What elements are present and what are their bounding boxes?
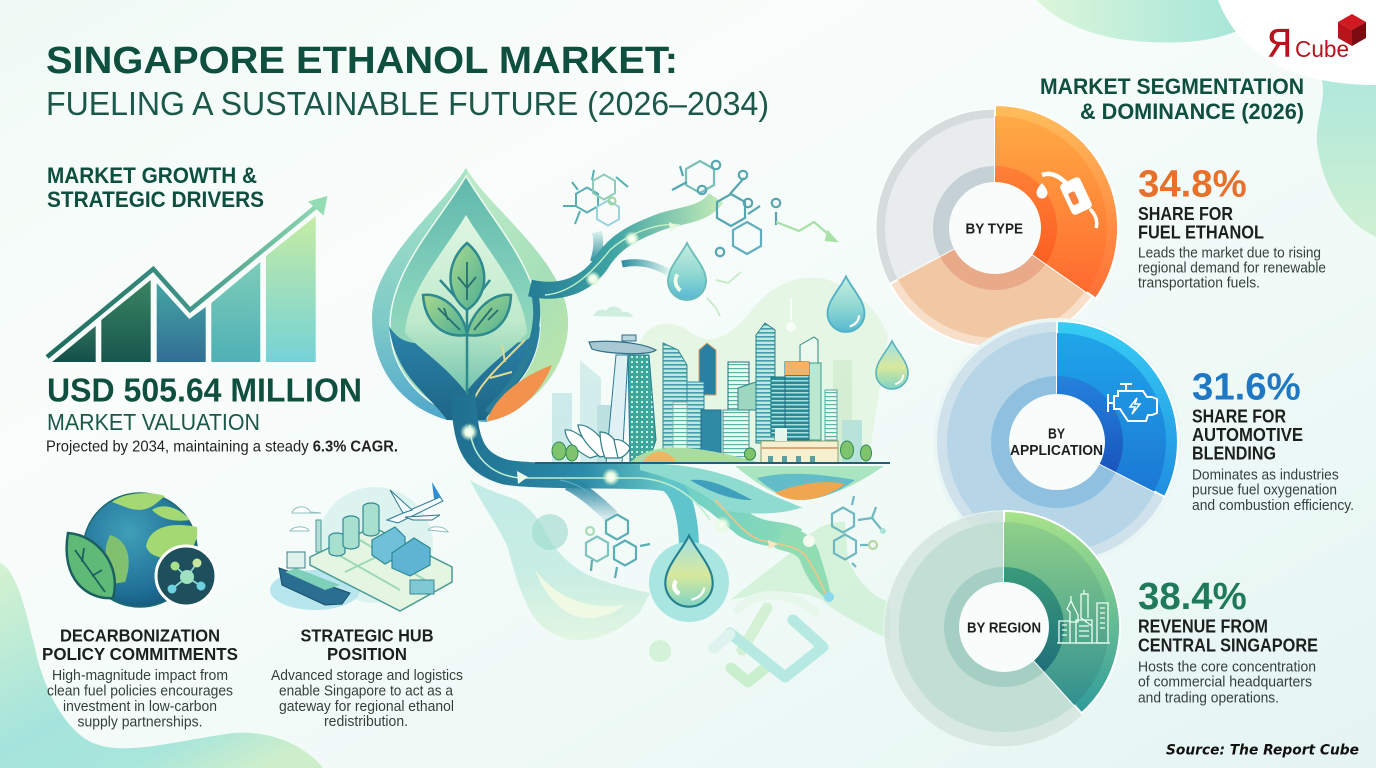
- text: decarbonization description: [47, 668, 233, 730]
- segment: pale blue remainder: [937, 322, 1164, 562]
- dark stripe tower: [771, 377, 787, 437]
- text: decarbonization description: clean fuel policies encourages: [47, 684, 233, 700]
- text: strategic hub description: gateway for regional ethanol: [279, 699, 454, 715]
- text: decarbonization description: supply partnerships.: [78, 714, 202, 730]
- title line 1: SINGAPORE ETHANOL MARKET:: [46, 40, 678, 82]
- text: fuel ethanol stat: transportation fuels.: [1138, 276, 1260, 292]
- donut chart: by type: [876, 105, 1118, 347]
- dark blue tower: [699, 343, 716, 395]
- market valuation label: MARKET VALUATION: [47, 409, 260, 435]
- logo wordmark: Cube: [1295, 36, 1349, 62]
- glass tower: [738, 382, 756, 410]
- text: automotive blending stat: 31.6%: [1192, 366, 1301, 408]
- river teal waves: [640, 464, 803, 514]
- small cloud and birds: [593, 272, 796, 332]
- bar chart with rising arrow: [47, 196, 328, 362]
- background blob: right: [1317, 70, 1376, 237]
- background blob: bottom-left: [0, 563, 323, 768]
- source note: Source: The Report Cube: [1166, 742, 1359, 758]
- molecule bottom right: [832, 496, 886, 567]
- text: fuel ethanol stat: [1138, 164, 1326, 292]
- text: automotive blending stat: and combustion efficiency.: [1192, 498, 1354, 514]
- city tower: [687, 382, 704, 457]
- bottom droplet: [665, 536, 713, 607]
- text: central singapore stat: and trading operations.: [1138, 690, 1279, 706]
- segment: fuel ethanol: [995, 105, 1118, 299]
- text: strategic hub description: [271, 668, 463, 730]
- donut centre: [949, 182, 1041, 274]
- text: strategic hub description: enable Singapore to act as a: [279, 684, 453, 700]
- orange roof: [785, 362, 809, 375]
- text: central singapore stat: [1138, 576, 1318, 706]
- river markers: [460, 423, 834, 602]
- text: fuel ethanol stat: SHARE FOR: [1138, 204, 1233, 224]
- label: by application: BY: [1048, 426, 1065, 442]
- hill backdrop: [638, 278, 888, 463]
- text: automotive blending stat: AUTOMOTIVE: [1192, 425, 1303, 445]
- ArtScience lotus: [565, 425, 630, 458]
- tall tower: [756, 323, 775, 443]
- text: automotive blending stat: BLENDING: [1192, 443, 1276, 463]
- heading: market segmentation: MARKET SEGMENTATION: [1040, 74, 1304, 99]
- donut chart: by region: [884, 511, 1120, 747]
- label: by application: APPLICATION: [1010, 443, 1103, 459]
- top pale tower: [800, 337, 818, 363]
- label: by type: BY TYPE: [966, 221, 1023, 237]
- golden root: [470, 340, 525, 420]
- trees: [552, 441, 872, 461]
- leaf veins: [438, 262, 498, 330]
- illustration: central ethanol flow: [372, 161, 908, 682]
- low beige building: [761, 428, 838, 463]
- heading: decarbonization: POLICY COMMITMENTS: [42, 644, 238, 664]
- heading: market growth: [47, 163, 264, 212]
- donut chart: by application: [933, 318, 1181, 566]
- donut centre: [1009, 394, 1105, 490]
- icon: globe with leaf and molecule: [67, 493, 216, 607]
- text: decarbonization description: High-magnitude impact from: [52, 668, 228, 684]
- text: central singapore stat: CENTRAL SINGAPORE: [1138, 636, 1318, 656]
- pale tower: [728, 362, 749, 410]
- title: [46, 40, 769, 122]
- big drop right green side: [466, 168, 568, 422]
- pale ribbon outer: [470, 480, 650, 640]
- text: strategic hub description: redistribution.: [324, 714, 408, 730]
- text: decarbonization description: investment in low-carbon: [63, 699, 217, 715]
- heading: strategic hub: [300, 626, 434, 664]
- heading: strategic hub: STRATEGIC HUB: [300, 626, 434, 646]
- heading: market growth: STRATEGIC DRIVERS: [47, 187, 264, 212]
- icon: port logistics hub: [270, 482, 452, 611]
- right green ribbon: [730, 522, 890, 640]
- orange-top tower: [785, 362, 809, 440]
- river dark stripe: [690, 480, 752, 500]
- icon: fuel nozzle: [1036, 174, 1097, 228]
- background blob: top-right: [1037, 0, 1240, 42]
- icon: city buildings: [1057, 590, 1110, 643]
- segment: central singapore: [1004, 511, 1120, 713]
- donut centre: [959, 582, 1049, 672]
- label: by application: [1010, 426, 1103, 459]
- leaf left: [423, 295, 467, 335]
- stem: [440, 255, 490, 395]
- big drop middle layer: [390, 176, 540, 412]
- panel: market growth: [46, 163, 398, 456]
- plant: [423, 243, 525, 420]
- panel: strategic hub: [270, 482, 463, 730]
- heading: market segmentation: & DOMINANCE (2026): [1080, 99, 1304, 124]
- knot symbol: [714, 595, 823, 682]
- leaf right: [467, 295, 511, 335]
- heading: decarbonization: [42, 626, 238, 664]
- pale green dot: [649, 640, 671, 662]
- green lawn: [630, 448, 760, 463]
- molecule bottom left: [586, 514, 650, 578]
- beige tower: [673, 402, 687, 456]
- bowl: [389, 326, 540, 420]
- background towers: [552, 360, 862, 463]
- molecule top left: [563, 170, 628, 226]
- bottom droplet halo: [649, 542, 729, 622]
- droplet 2: [828, 276, 864, 332]
- segment: others grey: [876, 109, 995, 284]
- text: fuel ethanol stat: FUEL ETHANOL: [1138, 222, 1264, 242]
- label: by region: BY REGION: [967, 621, 1041, 637]
- skyline ground line: [535, 462, 890, 464]
- upper branch: [530, 198, 716, 295]
- text: central singapore stat: REVENUE FROM: [1138, 617, 1268, 637]
- segment: pale orange: [890, 228, 1092, 347]
- text: central singapore stat: 38.4%: [1138, 576, 1247, 618]
- droplet 1: [668, 243, 706, 300]
- ground crescent: [735, 466, 884, 500]
- river taper to the right: [775, 529, 831, 602]
- text: central singapore stat: of commercial headquarters: [1138, 675, 1312, 691]
- market value: USD 505.64 MILLION: [47, 372, 362, 408]
- orange accent in drop: [487, 365, 552, 421]
- leaf top: [450, 243, 484, 310]
- droplet 3: [876, 341, 908, 389]
- pale ribbon inner highlight: [535, 570, 625, 618]
- big drop outer: [372, 168, 568, 422]
- main stem and river: [463, 395, 796, 545]
- upper branch markers: [585, 222, 678, 287]
- text: central singapore stat: Hosts the core concentration: [1138, 660, 1316, 676]
- text: fuel ethanol stat: regional demand for renewable: [1138, 261, 1326, 277]
- Marina Bay Sands: [589, 335, 656, 463]
- drop inner body: [405, 215, 527, 392]
- donut halo: [933, 318, 1181, 566]
- text: automotive blending stat: [1192, 366, 1354, 514]
- drop right rim: [487, 287, 537, 412]
- title line 2: FUELING A SUSTAINABLE FUTURE (2026–2034): [46, 85, 769, 122]
- low block: [723, 410, 749, 463]
- heading: decarbonization: DECARBONIZATION: [60, 626, 220, 646]
- logo: RCube: [1218, 0, 1376, 85]
- text: strategic hub description: Advanced storage and logistics: [271, 668, 463, 684]
- skyline: [535, 323, 890, 464]
- pale green tower: [809, 363, 821, 440]
- panel: decarbonization: [42, 493, 238, 730]
- text: automotive blending stat: pursue fuel oxygenation: [1192, 483, 1337, 499]
- orange mound: [642, 452, 677, 463]
- heading: strategic hub: POSITION: [327, 644, 407, 664]
- segment: automotive blending: [1057, 321, 1178, 497]
- icon: engine: [1108, 384, 1157, 421]
- text: automotive blending stat: SHARE FOR: [1192, 407, 1286, 427]
- segment: pale remainder: [884, 511, 1083, 747]
- heading: market growth: MARKET GROWTH &: [47, 163, 257, 188]
- heading: market segmentation: [1040, 74, 1304, 124]
- logo mark: Я: [1266, 22, 1293, 66]
- dark teal tower: [701, 410, 721, 458]
- text: fuel ethanol stat: Leads the market due to rising: [1138, 246, 1321, 262]
- projection text: Projected by 2034, maintaining a steady 6.3% CAGR.: [46, 438, 398, 456]
- text: automotive blending stat: Dominates as industries: [1192, 467, 1339, 483]
- molecule top right: [672, 161, 836, 256]
- pale circle: [532, 514, 568, 550]
- logo cube: [1338, 14, 1366, 46]
- towers: [663, 343, 687, 460]
- text: fuel ethanol stat: 34.8%: [1138, 164, 1247, 206]
- far pale tower: [825, 390, 837, 440]
- logo background: [1218, 0, 1376, 85]
- river flow lines: [470, 425, 826, 595]
